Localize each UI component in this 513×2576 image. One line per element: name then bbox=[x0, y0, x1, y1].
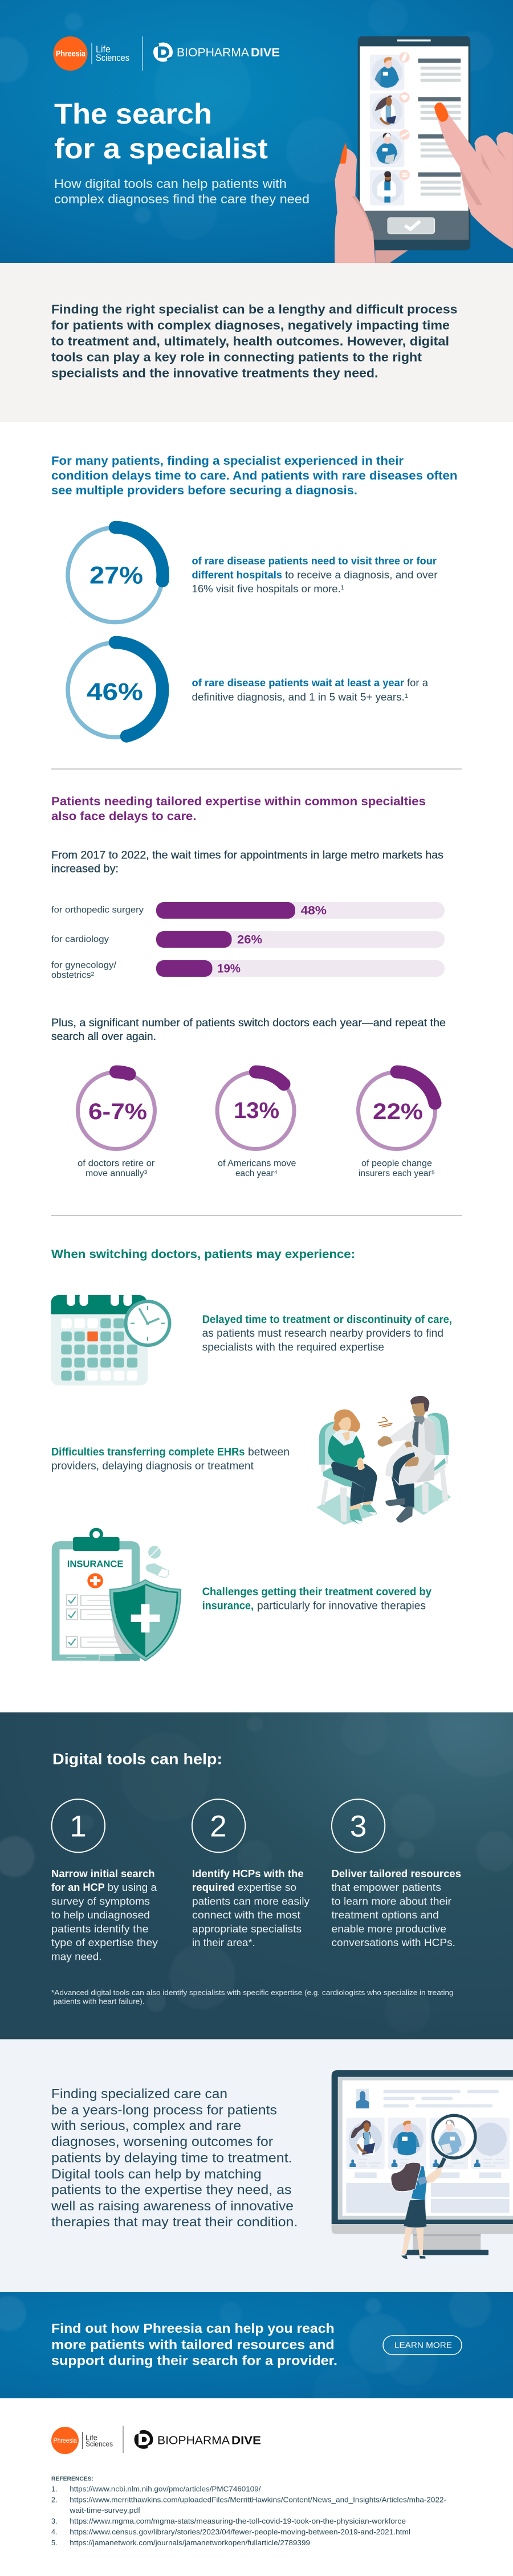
step 3: treatment options and bbox=[332, 1909, 439, 1920]
illustration: insurance clipboard and shield: INSURANCE bbox=[67, 1558, 124, 1569]
step 1: survey of symptoms bbox=[51, 1895, 150, 1907]
panel: call to action bbox=[0, 2286, 513, 2421]
caption: insurers: insurers each year⁵ bbox=[359, 1169, 435, 1178]
paragraph: therapies that may treat their condition. bbox=[51, 2214, 298, 2229]
donut: 22% bbox=[358, 1072, 435, 1149]
step 2: expertise so bbox=[238, 1881, 296, 1893]
illustration: patient and doctor seated bbox=[316, 1396, 451, 1525]
panel: common specialties bbox=[51, 795, 446, 1178]
step 1: for an HCP bbox=[51, 1881, 105, 1893]
paragraph: well as raising awareness of innovative bbox=[51, 2198, 294, 2213]
heading: rare disease bbox=[51, 454, 457, 497]
references: 2. bbox=[51, 2496, 57, 2504]
illustration: phone held in hands bbox=[335, 36, 513, 263]
intro text: to treatment and, ultimately, health outcomes. However, digital bbox=[51, 334, 449, 349]
step 2 bbox=[192, 1799, 310, 1948]
step 1: patients identify the bbox=[51, 1923, 149, 1935]
logo: BioPharma Dive: DIVE bbox=[251, 46, 280, 59]
text: delayed time to treatment: specialists with the required expertise bbox=[202, 1342, 384, 1353]
references: REFERENCES: bbox=[51, 2476, 93, 2483]
logo: Phreesia Life Sciences footer: Life bbox=[85, 2433, 97, 2442]
logo: Phreesia Life Sciences footer: Phreesia bbox=[54, 2436, 77, 2444]
bar chart: wait time increases: obstetrics² bbox=[51, 970, 94, 980]
text: switching doctors intro bbox=[51, 1017, 446, 1043]
step 2: 2 bbox=[210, 1810, 227, 1844]
step 2: required bbox=[192, 1881, 235, 1893]
intro text: specialists and the innovative treatments they need. bbox=[51, 366, 378, 380]
step 2: patients can more easily bbox=[192, 1895, 310, 1907]
paragraph: diagnoses, worsening outcomes for bbox=[51, 2134, 273, 2149]
panel: when switching doctors bbox=[51, 1248, 452, 1661]
paragraph: patients by delaying time to treatment. bbox=[51, 2151, 292, 2165]
footnote: patients with heart failure). bbox=[54, 1997, 145, 2006]
step 1: 1 bbox=[70, 1810, 87, 1844]
step 1: type of expertise they bbox=[51, 1936, 158, 1948]
icon: calendar and clock bbox=[51, 1293, 170, 1385]
paragraph: Finding specialized care can bbox=[51, 2086, 227, 2101]
references: https://www.merritthawkins.com/uploadedFiles/MerrittHawkins/Content/News_and_Insights/Articles/mha-2022- bbox=[70, 2496, 446, 2504]
panel: hero header bbox=[0, 0, 513, 263]
intro text: Finding the right specialist can be a lengthy and difficult process bbox=[51, 302, 457, 317]
references: 3. bbox=[51, 2517, 57, 2525]
references: 4. bbox=[51, 2528, 57, 2536]
caption: Americans: of Americans move bbox=[218, 1158, 296, 1169]
text: difficulties transferring EHRs: providers, delaying diagnosis or treatment bbox=[51, 1460, 254, 1472]
donut: 46% bbox=[68, 642, 162, 737]
title: The search bbox=[54, 98, 212, 130]
heading: common specialties bbox=[51, 795, 426, 823]
step 3: 3 bbox=[350, 1810, 367, 1844]
text: 46% description bbox=[192, 677, 429, 703]
text: 27% description: to receive a diagnosis, and over bbox=[285, 570, 438, 581]
donut: 6-7% bbox=[78, 1072, 155, 1149]
text: call to action: more patients with tailored resources and bbox=[51, 2337, 335, 2352]
text: difficulties transferring EHRs: Difficulties transferring complete EHRs bbox=[51, 1447, 245, 1458]
logo: Phreesia Life Sciences: Sciences bbox=[96, 53, 129, 63]
text: delayed time to treatment bbox=[202, 1314, 452, 1353]
logo: BioPharma Dive footer: BIOPHARMA bbox=[157, 2435, 230, 2447]
text: 27% description bbox=[192, 555, 438, 595]
heading: digital tools: Digital tools can help: bbox=[52, 1751, 222, 1768]
heading: common specialties: Patients needing tailored expertise within common specialties bbox=[51, 795, 426, 808]
bar chart: wait time increases: 48% bbox=[301, 903, 327, 917]
panel: specialized care summary bbox=[0, 2039, 513, 2292]
text: difficulties transferring EHRs: between bbox=[248, 1447, 290, 1458]
footnote bbox=[51, 1988, 454, 2006]
bar chart: wait time increases: for cardiology bbox=[51, 935, 109, 944]
paragraph: patients to the expertise they need, as bbox=[51, 2182, 292, 2197]
text: wait times intro bbox=[51, 849, 443, 875]
logo: Phreesia Life Sciences: Life bbox=[96, 44, 111, 55]
donut: 27%: 27% bbox=[89, 562, 143, 589]
heading: common specialties: also face delays to care. bbox=[51, 810, 196, 823]
logo: BioPharma Dive footer bbox=[134, 2430, 261, 2449]
title: for a specialist bbox=[54, 133, 268, 165]
logo: Phreesia Life Sciences: Phreesia bbox=[56, 49, 86, 59]
step 1: Narrow initial search bbox=[51, 1868, 155, 1879]
heading: rare disease: For many patients, finding a specialist experienced in their bbox=[51, 454, 404, 468]
text: switching doctors intro: Plus, a significant number of patients switch doctors each year—and repeat the bbox=[51, 1017, 446, 1029]
button: learn more: LEARN MORE bbox=[394, 2341, 452, 2350]
text: 46% description: for a bbox=[407, 677, 429, 689]
donut: 6-7%: 6-7% bbox=[88, 1099, 147, 1124]
step 1: may need. bbox=[51, 1950, 101, 1963]
step 3: conversations with HCPs. bbox=[332, 1936, 455, 1948]
title bbox=[54, 98, 268, 165]
panel: rare disease stats bbox=[51, 454, 457, 737]
illustration: insurance clipboard and shield bbox=[52, 1528, 181, 1661]
step 3: to learn more about their bbox=[332, 1895, 451, 1907]
panel: intro bbox=[0, 263, 513, 422]
donut: 46%: 46% bbox=[87, 678, 143, 706]
text: wait times intro: increased by: bbox=[51, 862, 119, 875]
step 1: by using a bbox=[107, 1881, 157, 1893]
text: 27% description: different hospitals bbox=[192, 570, 282, 581]
bar chart: wait time increases: 26% bbox=[237, 933, 262, 947]
text: challenges with insurance bbox=[202, 1586, 431, 1612]
caption: doctors bbox=[78, 1158, 155, 1178]
logo: Phreesia Life Sciences bbox=[54, 36, 142, 71]
donut: 13% bbox=[217, 1072, 294, 1149]
panel: footer bbox=[51, 2426, 446, 2547]
text: delayed time to treatment: as patients must research nearby providers to find bbox=[202, 1328, 443, 1340]
text: challenges with insurance: particularly for innovative therapies bbox=[257, 1600, 426, 1612]
caption: Americans: each year⁴ bbox=[235, 1169, 278, 1178]
step 2: Identify HCPs with the bbox=[192, 1868, 304, 1879]
logo: BioPharma Dive bbox=[153, 42, 280, 62]
text: call to action: Find out how Phreesia can help you reach bbox=[51, 2321, 335, 2336]
references: https://jamanetwork.com/journals/jamanetworkopen/fullarticle/2789399 bbox=[70, 2539, 310, 2547]
bar chart: wait time increases bbox=[51, 902, 445, 980]
logo: Phreesia Life Sciences footer bbox=[51, 2426, 123, 2454]
text: challenges with insurance: Challenges getting their treatment covered by bbox=[202, 1586, 431, 1598]
paragraph: Digital tools can help by matching bbox=[51, 2167, 262, 2181]
step 3: that empower patients bbox=[332, 1881, 441, 1893]
heading: rare disease: see multiple providers before securing a diagnosis. bbox=[51, 484, 357, 497]
caption: insurers: of people change bbox=[361, 1158, 432, 1169]
paragraph: be a years-long process for patients bbox=[51, 2102, 277, 2117]
references: https://www.ncbi.nlm.nih.gov/pmc/articles/PMC7460109/ bbox=[70, 2485, 261, 2493]
footnote: *Advanced digital tools can also identify specialists with specific expertise (e.g. cardiologists who specialize in treating bbox=[51, 1988, 454, 1997]
step 1 bbox=[51, 1799, 158, 1963]
donut: 22%: 22% bbox=[373, 1099, 423, 1124]
intro text bbox=[51, 302, 457, 380]
intro text: for patients with complex diagnoses, negatively impacting time bbox=[51, 318, 450, 333]
donut: 27% bbox=[68, 527, 163, 622]
text: call to action: support during their search for a provider. bbox=[51, 2353, 337, 2368]
step 1: to help undiagnosed bbox=[51, 1909, 150, 1920]
subtitle: How digital tools can help patients with bbox=[54, 177, 287, 191]
paragraph bbox=[51, 2086, 298, 2229]
step 3 bbox=[332, 1799, 461, 1948]
text: delayed time to treatment: Delayed time to treatment or discontinuity of care, bbox=[202, 1314, 452, 1326]
text: 46% description: of rare disease patients wait at least a year bbox=[192, 677, 404, 689]
subtitle: complex diagnoses find the care they need bbox=[54, 192, 310, 206]
step 2: in their area*. bbox=[192, 1936, 255, 1948]
text: difficulties transferring EHRs bbox=[51, 1447, 290, 1472]
caption: Americans bbox=[218, 1158, 296, 1178]
references: 1. bbox=[51, 2485, 57, 2493]
logo: Phreesia Life Sciences footer: Sciences bbox=[85, 2440, 113, 2448]
text: 46% description: definitive diagnosis, and 1 in 5 wait 5+ years.¹ bbox=[192, 691, 408, 703]
intro text: tools can play a key role in connecting patients to the right bbox=[51, 350, 422, 365]
bar chart: wait time increases: 19% bbox=[217, 961, 241, 975]
step 2: connect with the most bbox=[192, 1909, 300, 1920]
logo: BioPharma Dive: BIOPHARMA bbox=[177, 46, 249, 59]
bar chart: wait time increases: for orthopedic surgery bbox=[51, 906, 144, 915]
caption: insurers bbox=[359, 1158, 435, 1178]
subtitle bbox=[54, 177, 310, 206]
button: learn more bbox=[383, 2336, 462, 2354]
text: 27% description: 16% visit five hospitals or more.¹ bbox=[192, 583, 344, 595]
text: 27% description: of rare disease patients need to visit three or four bbox=[192, 555, 437, 567]
logo: BioPharma Dive footer: DIVE bbox=[231, 2435, 261, 2447]
bar chart: wait time increases: for gynecology/ bbox=[51, 960, 117, 970]
heading: rare disease: condition delays time to care. And patients with rare diseases often bbox=[51, 469, 457, 482]
references: https://www.mgma.com/mgma-stats/measuring-the-toll-covid-19-took-on-the-physician-workforce bbox=[70, 2517, 406, 2525]
illustration: woman searching profiles on monitor bbox=[332, 2070, 513, 2259]
references: https://www.census.gov/library/stories/2023/04/fewer-people-moving-between-2019-and-2021.html bbox=[70, 2528, 410, 2536]
panel: digital tools can help bbox=[0, 1663, 513, 2039]
text: challenges with insurance: insurance, bbox=[202, 1600, 254, 1612]
text: call to action bbox=[51, 2321, 337, 2368]
heading: when switching doctors: When switching doctors, patients may experience: bbox=[51, 1248, 355, 1261]
text: wait times intro: From 2017 to 2022, the wait times for appointments in large metro markets has bbox=[51, 849, 443, 861]
caption: doctors: of doctors retire or bbox=[78, 1158, 155, 1169]
donut: 13%: 13% bbox=[234, 1098, 279, 1123]
references bbox=[51, 2476, 446, 2547]
step 2: appropriate specialists bbox=[192, 1923, 302, 1935]
references: 5. bbox=[51, 2539, 57, 2547]
step 3: Deliver tailored resources bbox=[332, 1868, 461, 1879]
paragraph: with serious, complex and rare bbox=[51, 2118, 241, 2133]
references: wait-time-survey.pdf bbox=[69, 2507, 141, 2514]
text: switching doctors intro: search all over again. bbox=[51, 1030, 156, 1043]
caption: doctors: move annually³ bbox=[85, 1169, 147, 1178]
step 3: enable more productive bbox=[332, 1923, 446, 1935]
